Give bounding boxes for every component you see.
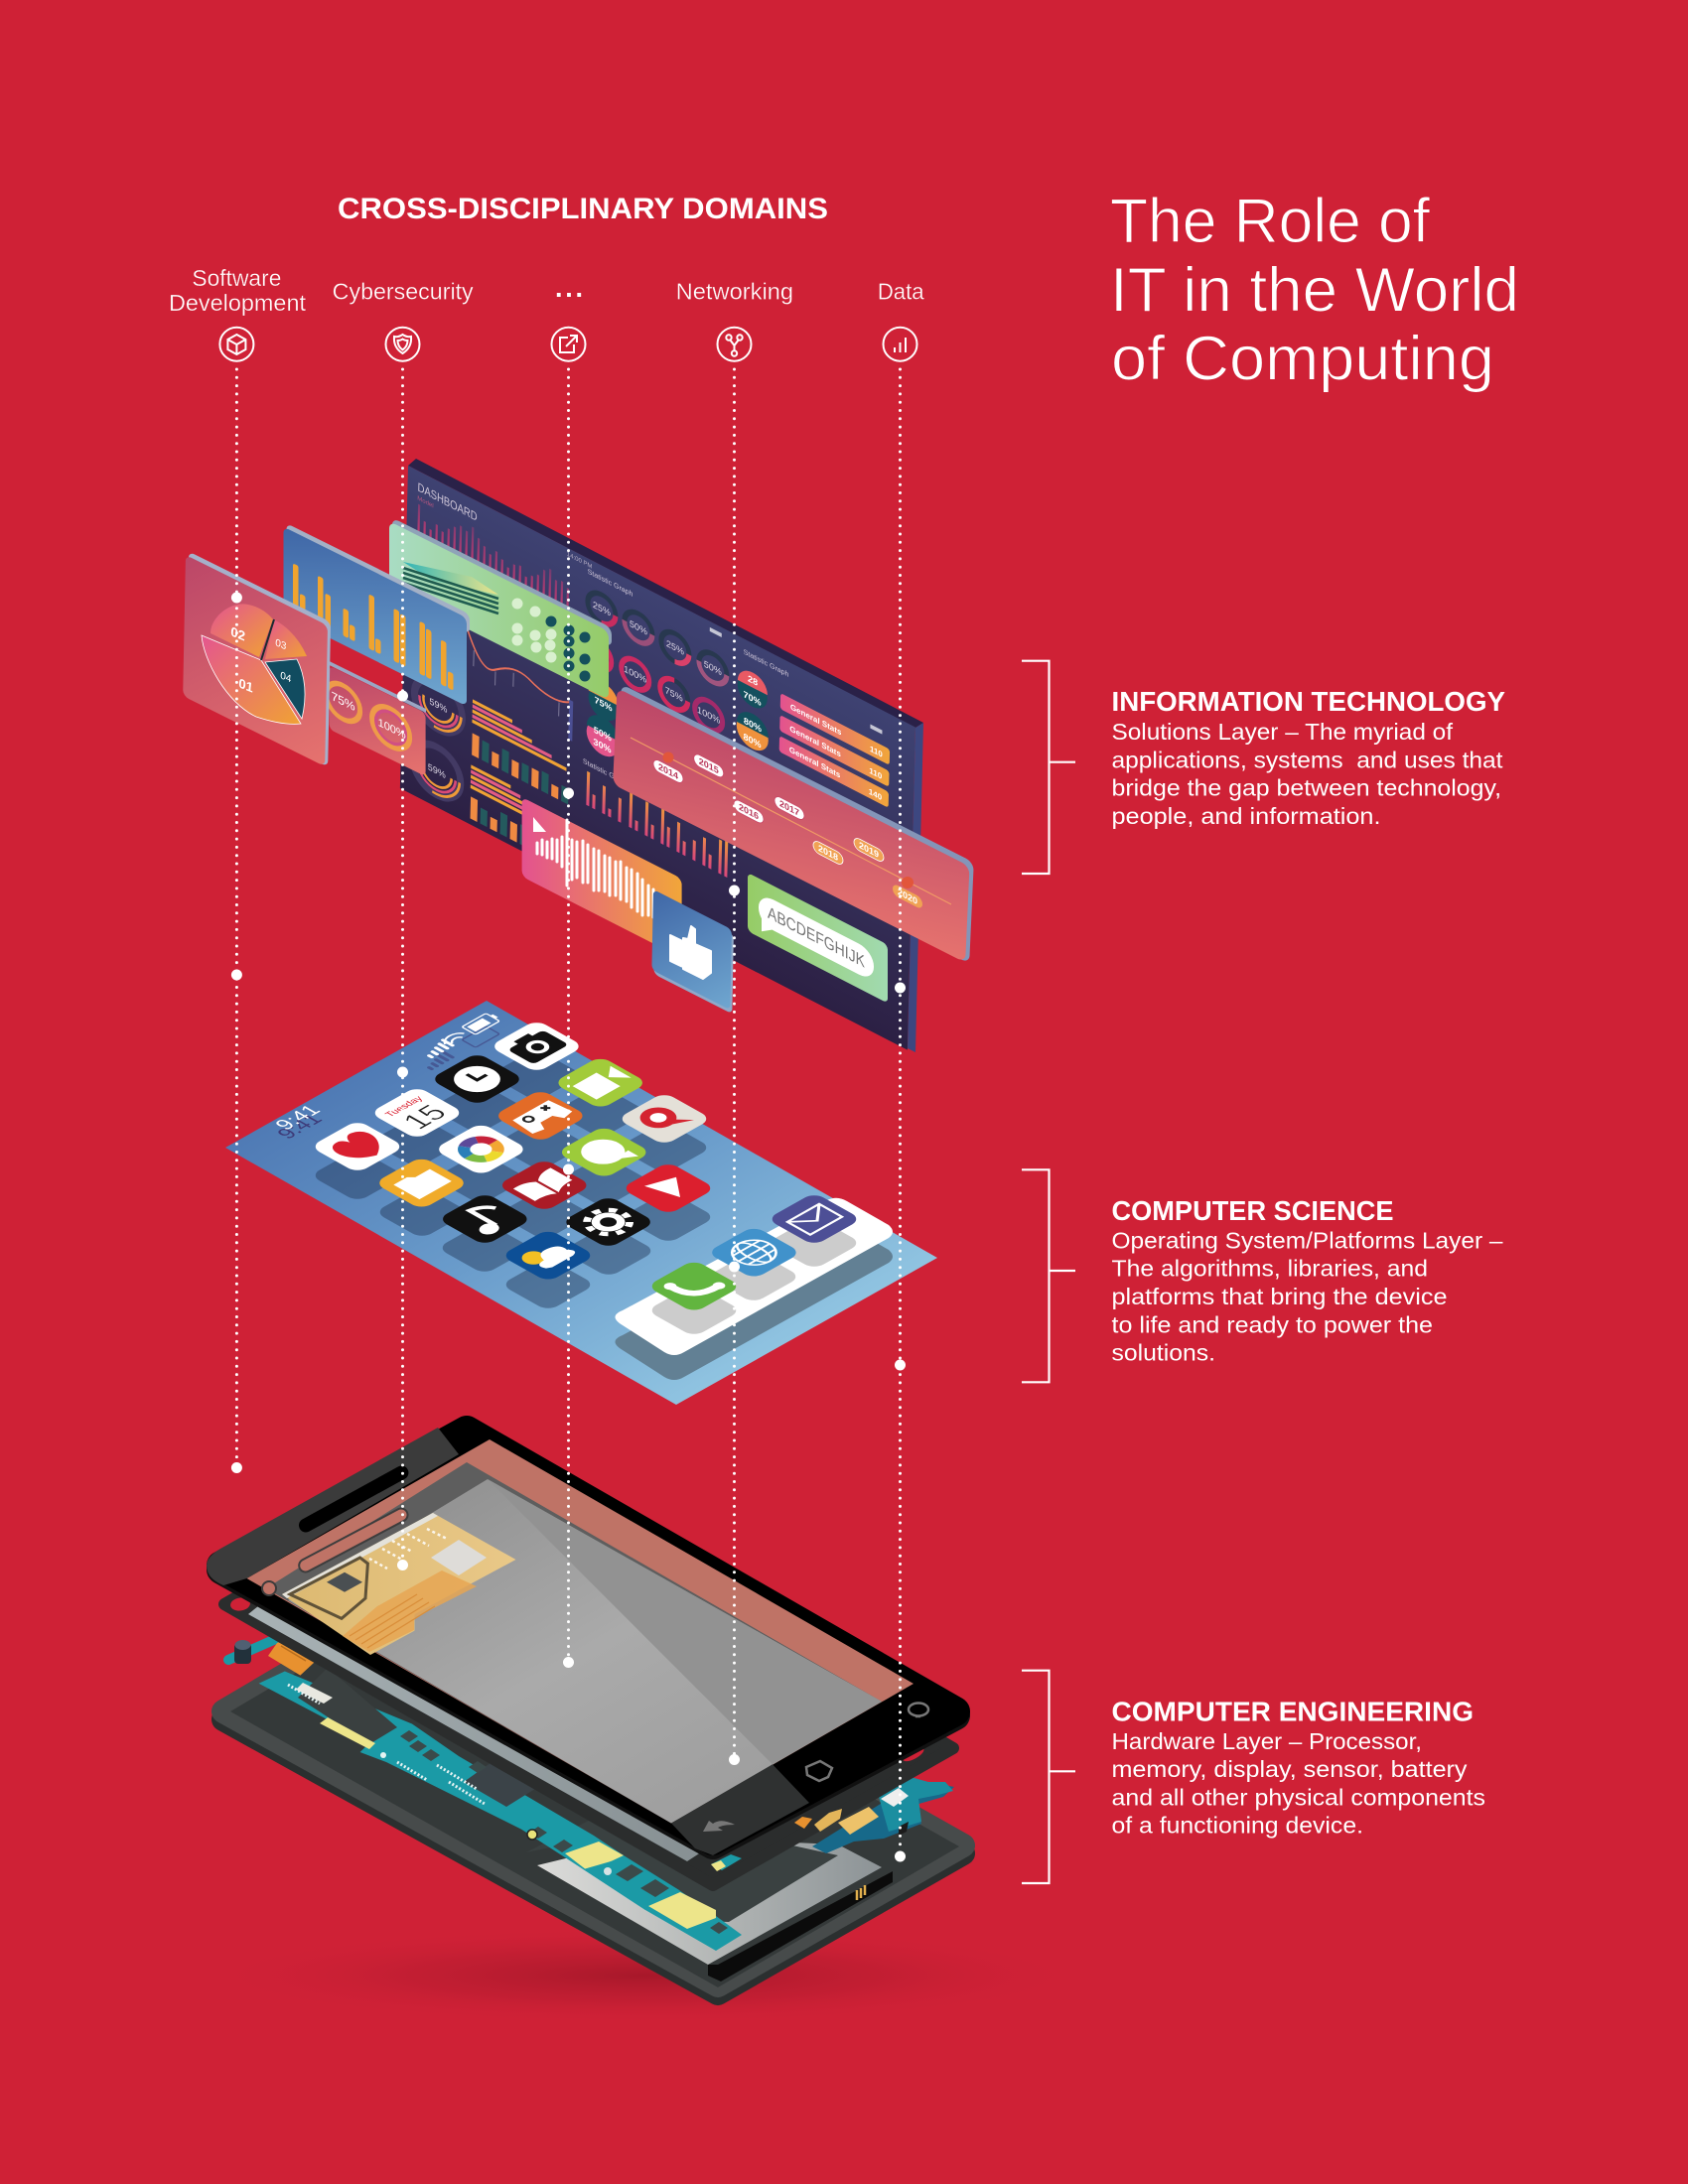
text: computer science xyxy=(1112,1195,1503,1366)
battery xyxy=(526,1807,893,1981)
dashboard: large back panel: General Stats xyxy=(789,745,841,780)
phone front glass xyxy=(207,1428,955,1855)
dashboard: large back panel: 100% xyxy=(697,705,721,727)
home screen layer xyxy=(225,1001,937,1405)
dashboard: large back panel: DASHBOARD xyxy=(417,479,478,524)
text: information technology: Solutions Layer – The myriad of xyxy=(1112,719,1454,745)
panel: timeline card: 2020 xyxy=(898,887,917,907)
circuit board right and camera xyxy=(228,1631,954,1853)
text: information technology: people, and information. xyxy=(1112,803,1380,829)
panel: pie chart card: 01 xyxy=(238,675,254,696)
dotted line: software development xyxy=(231,369,242,1473)
dashboard: large back panel: 80% xyxy=(744,716,763,736)
dashboard: large back panel: 25% xyxy=(593,600,611,619)
dashboard: large back panel: Statistic Graph xyxy=(744,647,789,679)
text: computer engineering xyxy=(1112,1696,1485,1839)
phone back shell xyxy=(223,1567,963,1993)
dashboard: large back panel: Statistic Graph xyxy=(588,567,633,599)
icon: video app xyxy=(553,1056,648,1110)
panel: blue bar chart card xyxy=(284,522,470,708)
icon: play app xyxy=(621,1161,716,1215)
icon: clock app xyxy=(430,1052,524,1106)
icon: game controller app xyxy=(492,1089,588,1143)
panel: timeline card: 2018 xyxy=(818,843,839,864)
panel: timeline card: 2015 xyxy=(699,756,719,777)
panel: audio waveform card xyxy=(522,797,682,958)
heading: cross-disciplinary domains: CROSS-DISCIPLINARY DOMAINS xyxy=(338,193,828,225)
flexible circuit panel xyxy=(282,1513,516,1655)
dashboard: large back panel: General Stats xyxy=(789,724,841,759)
domain labels: Software xyxy=(192,265,281,291)
panel: progress rings card: 75% xyxy=(332,689,355,714)
dashboard: large back panel: 75% xyxy=(594,695,613,715)
panel: speech bubble card xyxy=(748,873,888,1004)
dashboard: large back panel: 140 xyxy=(869,786,883,802)
dashboard: large back panel: 75% xyxy=(665,685,683,705)
text: computer engineering: of a functioning device. xyxy=(1112,1813,1363,1839)
text: computer engineering: COMPUTER ENGINEERING xyxy=(1112,1696,1474,1726)
dotted line: data xyxy=(895,369,906,1862)
icon: aperture app xyxy=(434,1123,528,1176)
title: of Computing xyxy=(1111,325,1494,394)
dashboard: large back panel: 25% xyxy=(666,638,684,658)
icon: calendar app: 15 xyxy=(394,1100,455,1134)
panel: timeline card xyxy=(613,682,974,965)
dashboard: large back panel: Statistic Graph xyxy=(583,756,629,788)
icon: globe app xyxy=(707,1226,801,1280)
circuit board main xyxy=(259,1668,742,1951)
icon: map pin app xyxy=(617,1092,712,1146)
panel: progress rings card: 100% xyxy=(378,716,406,742)
panel: timeline card: 2017 xyxy=(779,798,799,819)
text: information technology: bridge the gap between technology, xyxy=(1112,775,1501,801)
icon: settings gear app xyxy=(561,1195,655,1249)
icon: cube xyxy=(219,328,253,361)
ground shadow xyxy=(209,1928,1082,2023)
text: information technology xyxy=(1112,686,1505,829)
dashboard: large back panel: 14:00 PM xyxy=(567,551,593,571)
bracket: computer engineering xyxy=(1022,1671,1075,1883)
icon: mail app xyxy=(767,1192,862,1246)
text: computer engineering: memory, display, sensor, battery xyxy=(1112,1756,1468,1782)
dashboard: large back panel: 70% xyxy=(743,689,762,709)
icon: external link xyxy=(552,328,586,361)
text: computer science: COMPUTER SCIENCE xyxy=(1112,1195,1394,1226)
domain labels xyxy=(169,265,924,316)
panel: green hex grid card xyxy=(389,516,612,701)
dotted line: networking xyxy=(729,369,740,1765)
panel: progress rings card xyxy=(327,661,426,776)
dotted line: more domains xyxy=(563,369,574,1668)
icon: network nodes xyxy=(717,328,751,361)
icon: search button xyxy=(909,1704,928,1716)
text: computer science: to life and ready to power the xyxy=(1112,1311,1433,1337)
title: The Role of xyxy=(1110,187,1430,256)
dashboard: large back panel: General Stats xyxy=(790,702,842,738)
domain labels: ... xyxy=(555,273,583,303)
dashboard: large back panel: Model xyxy=(417,494,434,509)
home screen layer: 9:41 xyxy=(270,1102,326,1133)
dashboard: large back panel: 80% xyxy=(743,732,762,751)
dashboard: large back panel: 30% xyxy=(593,737,612,756)
dashboard: large back panel: 100% xyxy=(624,664,647,686)
panel: pie chart card: 04 xyxy=(280,670,292,685)
dashboard: large back panel: 59% xyxy=(428,761,446,781)
panel: pie chart card: 02 xyxy=(230,623,246,644)
bracket: computer science xyxy=(1022,1169,1075,1382)
icon: heart app xyxy=(310,1120,405,1173)
dashboard: large back panel: 50% xyxy=(704,659,722,679)
panel: pie chart card: 03 xyxy=(275,637,287,652)
icon: music app xyxy=(437,1192,532,1246)
text: computer science: The algorithms, libraries, and xyxy=(1112,1256,1428,1282)
dashboard: large back panel: 28 xyxy=(748,673,759,689)
panel: timeline card: 2019 xyxy=(859,840,879,861)
phone middle frame xyxy=(224,1465,953,1885)
icon: back button xyxy=(703,1821,735,1832)
icon: calendar app: Tuesday xyxy=(383,1095,426,1119)
domain labels: Data xyxy=(878,279,924,305)
dashboard: large back panel xyxy=(400,459,923,1052)
icon: weather app xyxy=(500,1229,596,1283)
dashboard: large back panel: 50% xyxy=(630,618,647,638)
title: IT in the World xyxy=(1110,255,1519,325)
icon: folder app xyxy=(374,1157,469,1210)
icon: book app xyxy=(496,1159,592,1212)
text: computer engineering: and all other physical components xyxy=(1112,1784,1485,1810)
text: information technology: applications, systems and uses that xyxy=(1112,747,1503,772)
icon: bar chart xyxy=(884,328,917,361)
dashboard: large back panel: 59% xyxy=(429,696,448,716)
text: information technology: INFORMATION TECHNOLOGY xyxy=(1112,686,1505,717)
dashboard: large back panel: 50% xyxy=(594,725,612,745)
panel: pie chart card xyxy=(183,550,331,768)
title xyxy=(1110,187,1519,394)
icon: calendar app xyxy=(369,1086,465,1140)
icon: shield xyxy=(385,328,419,361)
icon: phone app xyxy=(646,1260,742,1313)
panel: thumbs up card xyxy=(651,889,734,1014)
icon: camera app xyxy=(490,1020,584,1073)
panel: timeline card: 2014 xyxy=(658,761,679,782)
domain labels: Networking xyxy=(676,279,793,305)
icon: home button xyxy=(806,1761,832,1781)
dashboard: large back panel: 110 xyxy=(869,765,883,781)
text: computer science: Operating System/Platforms Layer – xyxy=(1112,1228,1503,1254)
domain labels: Cybersecurity xyxy=(333,279,474,305)
text: computer science: solutions. xyxy=(1112,1340,1215,1366)
dashboard: large back panel: 110 xyxy=(870,744,883,759)
icon: chat app xyxy=(556,1126,651,1179)
text: computer science: platforms that bring the device xyxy=(1112,1284,1448,1309)
home screen layer: 9:41 xyxy=(272,1111,328,1142)
panel: timeline card: 2016 xyxy=(739,802,759,823)
text: computer engineering: Hardware Layer – Processor, xyxy=(1112,1728,1422,1754)
dotted line: cybersecurity xyxy=(397,369,408,1570)
bracket: information technology xyxy=(1022,661,1075,874)
domain labels: Development xyxy=(169,290,307,316)
dock tray xyxy=(616,1198,893,1380)
panel: speech bubble card: ABCDEFGHIJK xyxy=(768,902,865,972)
